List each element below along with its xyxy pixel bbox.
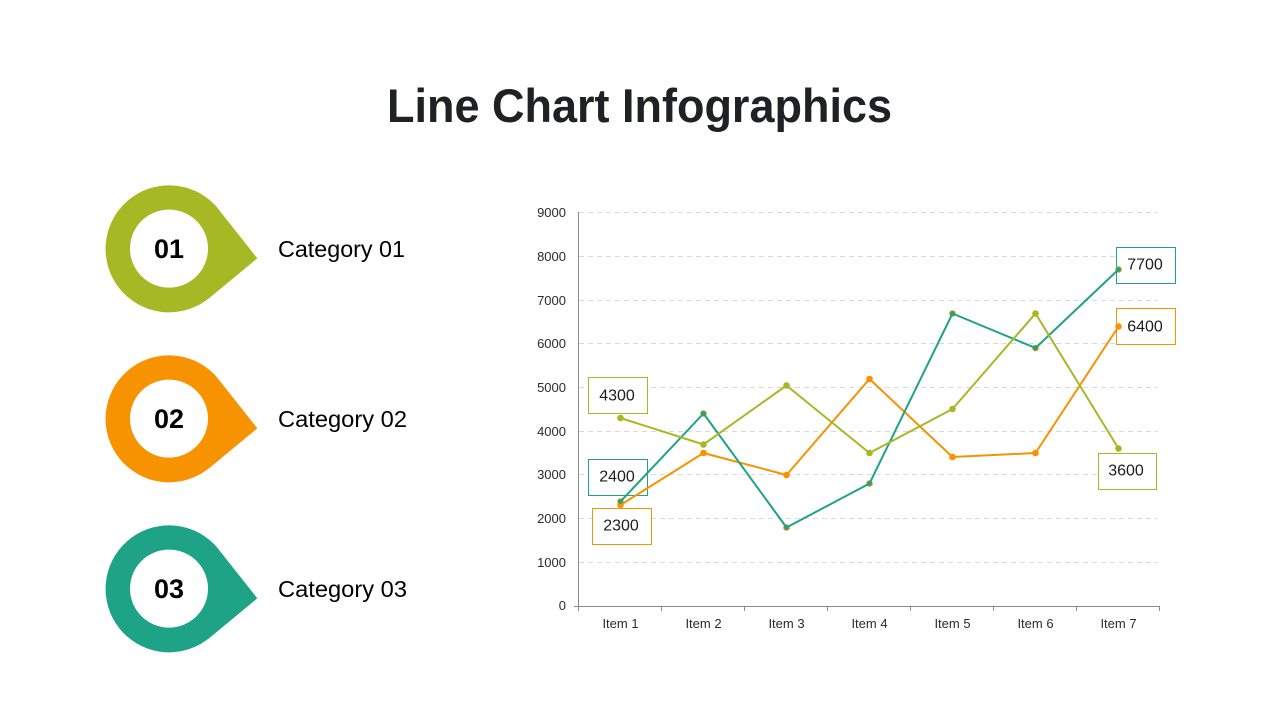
panel: category 01 [106,185,405,312]
y axis labels: 6000 [537,336,566,351]
number 01: 01 [154,234,184,264]
y axis labels [537,205,566,613]
label: category 02: Category 02 [278,406,407,432]
x axis labels: Item 1 [602,616,639,631]
x axis labels: Item 6 [1017,616,1054,631]
x axis labels: Item 3 [768,616,805,631]
label: category 03: Category 03 [278,576,407,602]
y axis labels: 7000 [537,293,566,308]
number 02: 02 [154,404,184,434]
data label values: 6400 [1127,318,1163,336]
title: Line Chart Infographics [387,79,892,132]
y axis labels: 9000 [537,205,566,220]
panel: category 03 [106,525,407,652]
series: category 03 teal [618,267,1121,530]
x axis labels: Item 4 [851,616,888,631]
icon: pin 03 [106,525,257,652]
y axis labels: 8000 [537,249,566,264]
y axis labels: 4000 [537,424,566,439]
icon: pin 02 [106,355,257,482]
y axis labels: 2000 [537,511,566,526]
data label values: 7700 [1127,256,1163,274]
panel: category 02 [106,355,407,482]
data label values: 4300 [599,388,635,404]
icon: pin 01 [106,185,257,312]
number 03: 03 [154,574,184,604]
data label values: 2400 [599,468,635,486]
data label values [599,256,1163,534]
series: category 02 orange [617,266,1122,531]
data label values: 3600 [1108,462,1144,480]
x axis labels: Item 5 [934,616,971,631]
y axis labels: 3000 [537,467,566,482]
x axis labels: Item 2 [685,616,722,631]
y axis labels: 5000 [537,380,566,395]
x axis labels: Item 7 [1100,616,1137,631]
label: category 01: Category 01 [278,236,405,262]
series: category 01 green [617,310,1122,456]
data label boxes [588,248,1176,544]
line chart [537,205,1176,631]
x axis labels [602,616,1137,631]
y axis labels: 0 [559,598,566,613]
y axis labels: 1000 [537,555,566,570]
data label values: 2300 [603,518,639,534]
